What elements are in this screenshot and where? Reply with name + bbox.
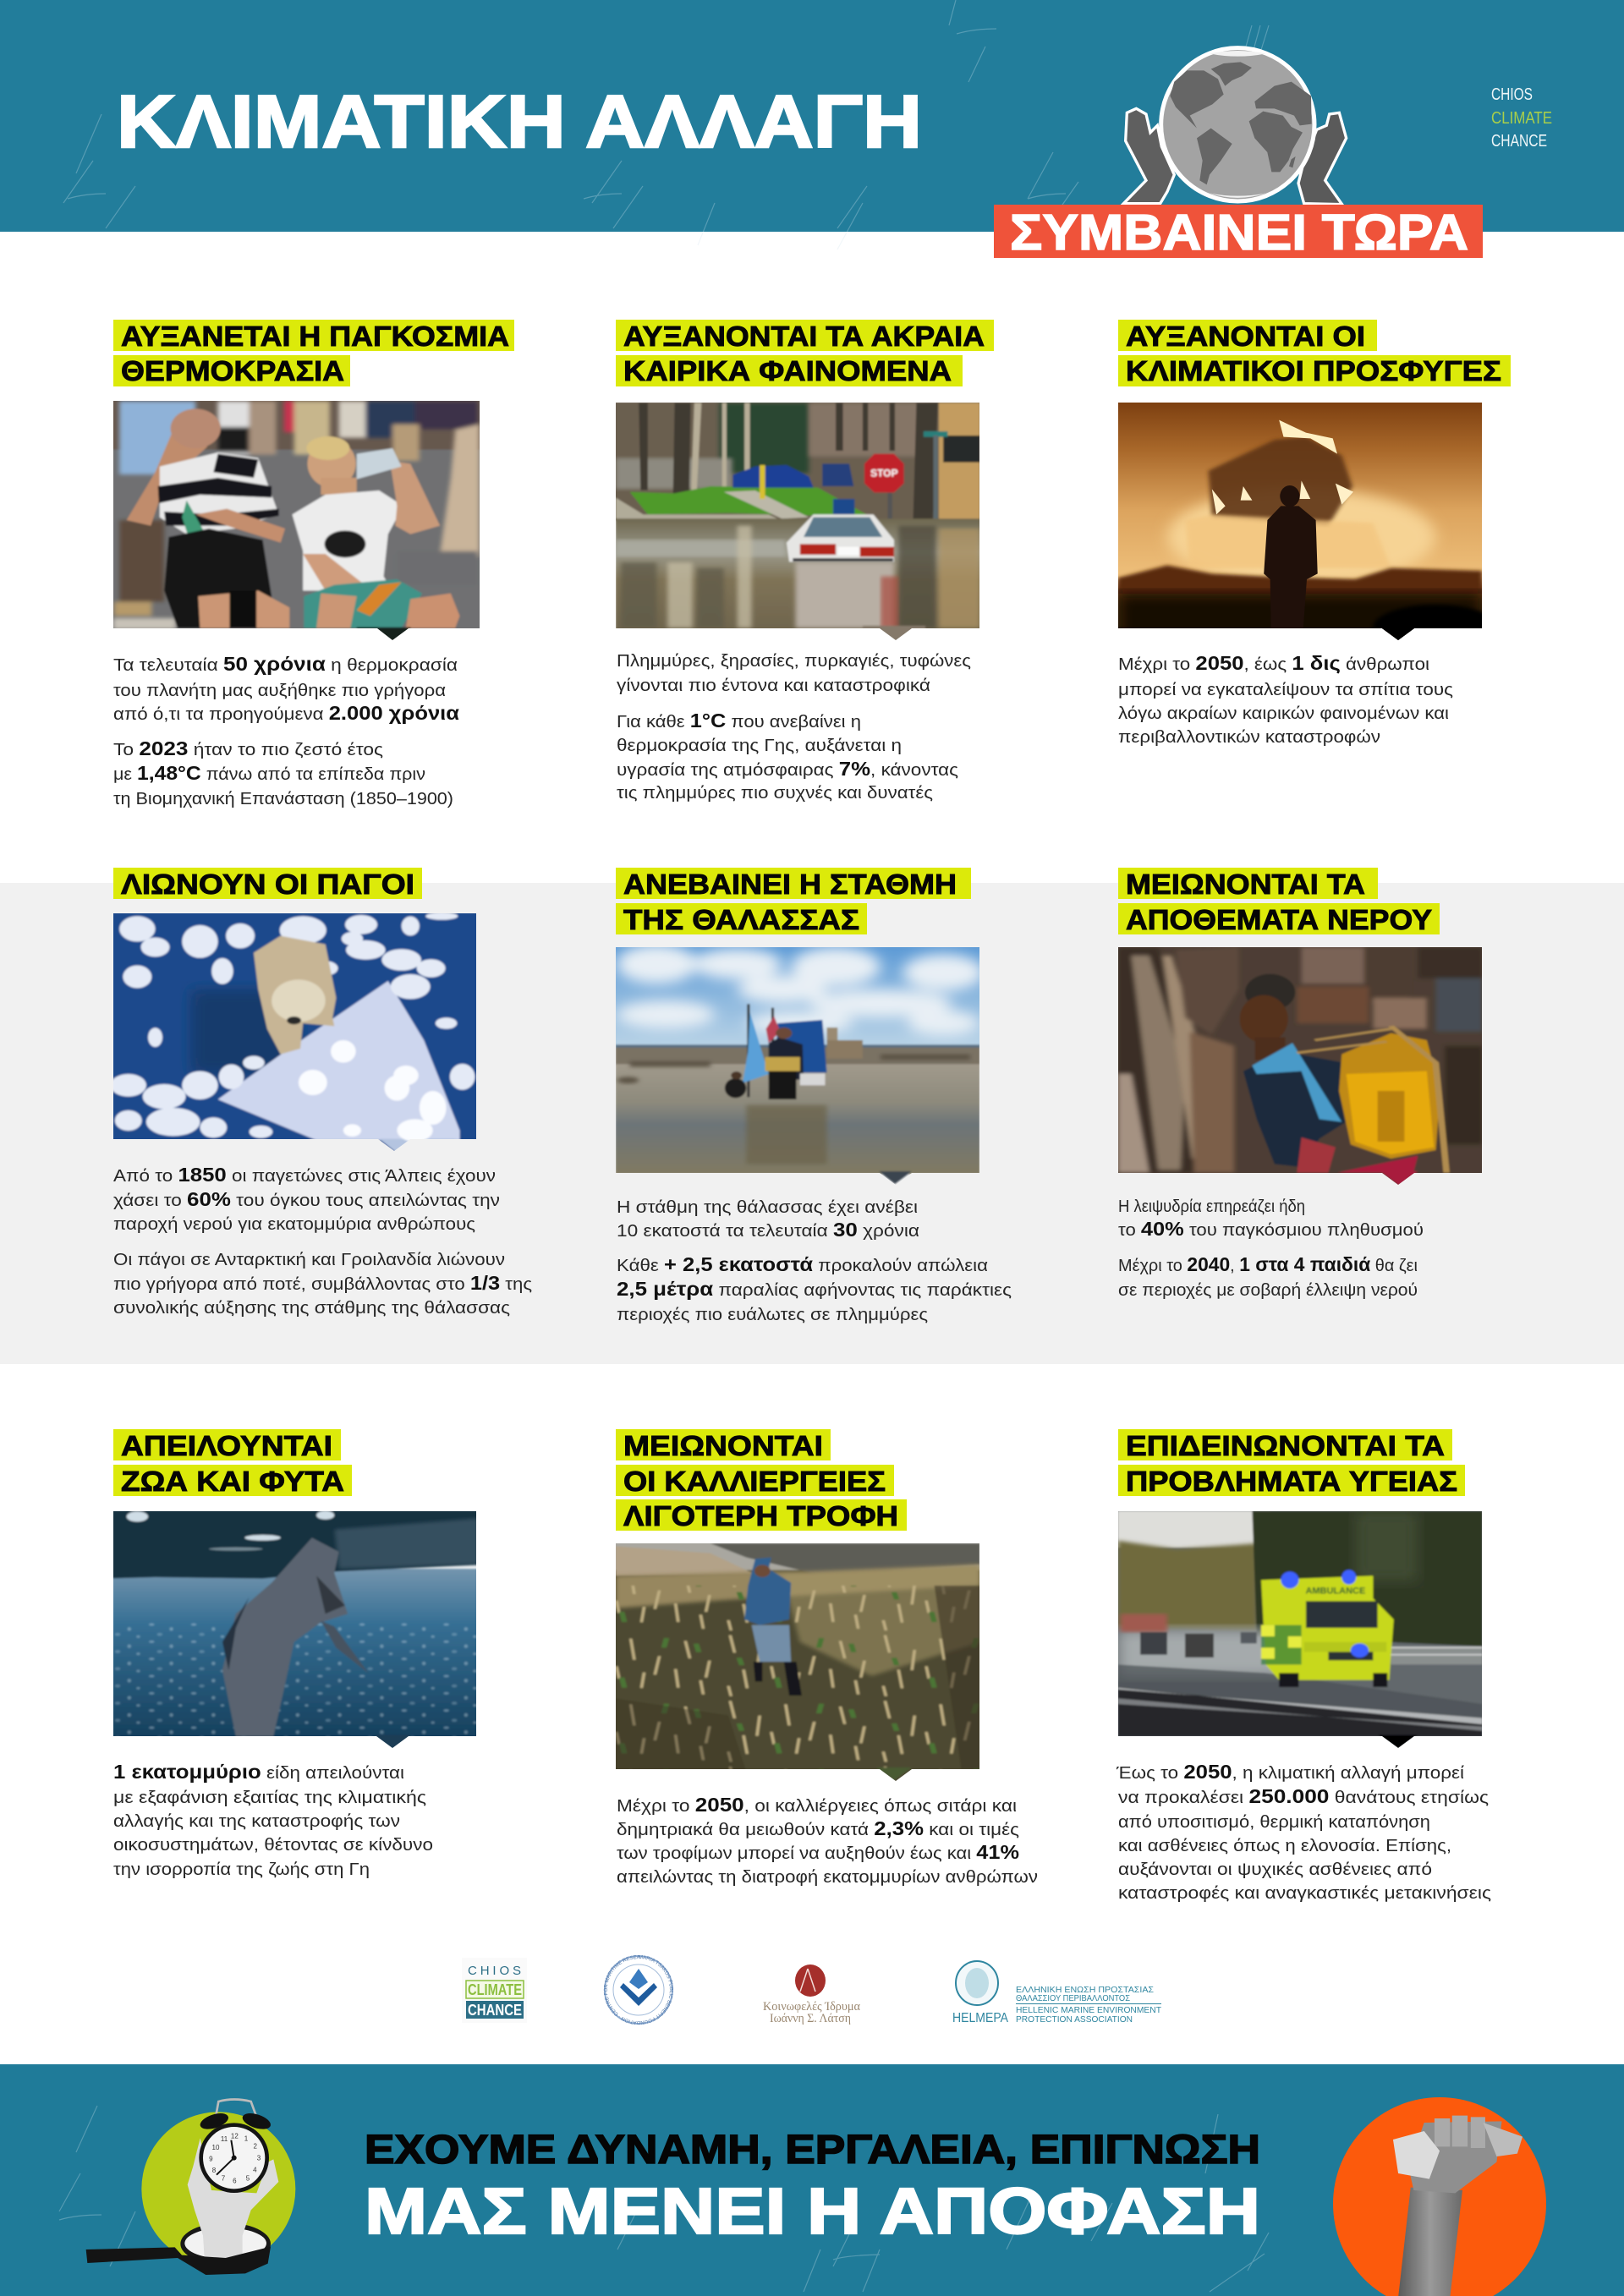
icon: clock in hand through magnifier: 10 <box>212 2144 220 2151</box>
heading <box>1118 320 1511 386</box>
panel: melting ice <box>106 868 532 1318</box>
panel: global temperature <box>102 320 514 808</box>
heading: ΜΕΙΩΝΟΝΤΑΙ <box>623 1430 823 1461</box>
photo: flooded street and car: STOP <box>870 467 898 479</box>
heading: ΖΩΑ ΚΑΙ ΦΥΤΑ <box>121 1466 344 1497</box>
footer banner <box>0 2064 1624 2296</box>
text block: Τα τελευταία 50 χρόνια η θερμοκρασία <box>113 653 458 675</box>
panel: animals and plants <box>106 1429 482 1879</box>
text block: 10 εκατοστά τα τελευταία 30 χρόνια <box>617 1219 919 1241</box>
heading: we have power, tools, awareness: ΕΧΟΥΜΕ ΔΥΝΑΜΗ, ΕΡΓΑΛΕΙΑ, ΕΠΙΓΝΩΣΗ <box>365 2128 1260 2173</box>
text block <box>617 1197 1012 1324</box>
text block: λόγω ακραίων καιρικών φαινομένων και <box>1118 704 1449 723</box>
icon: clock in hand through magnifier: 11 <box>221 2135 228 2143</box>
logo text: chios climate chance: CLIMATE <box>1491 109 1552 128</box>
text block: συνολικής αύξησης της στάθμης της θάλασσας <box>113 1298 510 1318</box>
icon: clock in hand through magnifier: 6 <box>233 2177 237 2184</box>
logo: latsis foundation: Ιωάννη Σ. Λάτση <box>770 2012 851 2025</box>
header banner <box>0 0 1624 260</box>
logo: helmepa: HELMEPA <box>952 2011 1008 2025</box>
heading <box>113 320 514 386</box>
icon: clock in hand through magnifier: 2 <box>253 2143 257 2151</box>
icon: clock in hand through magnifier: 9 <box>209 2155 213 2162</box>
text block: σε περιοχές με σοβαρή έλλειψη νερού <box>1118 1280 1418 1300</box>
panel: health <box>1113 1429 1491 1903</box>
text block: Κάθε + 2,5 εκατοστά προκαλούν απώλεια <box>617 1253 988 1275</box>
logo: latsis foundation: Κοινωφελές Ίδρυμα <box>763 2000 860 2014</box>
text block: των τροφίμων μπορεί να αυξηθούν έως και 41% <box>617 1841 1019 1863</box>
badge: happening now: ΣΥΜΒΑΙΝΕΙ ΤΩΡΑ <box>1010 205 1468 260</box>
text block <box>113 1164 532 1318</box>
text block: μπορεί να εγκαταλείψουν τα σπίτια τους <box>1118 680 1453 699</box>
logo: latsis foundation <box>763 1964 860 2025</box>
logo: chios climate chance: CHANCE <box>468 2002 522 2019</box>
text block: Μέχρι το 2040, 1 στα 4 παιδιά θα ζει <box>1118 1253 1418 1275</box>
logos row <box>465 1955 1162 2025</box>
heading <box>113 1429 352 1497</box>
icon: clock in hand through magnifier: 4 <box>253 2167 257 2174</box>
text block: παροχή νερού για εκατομμύρια ανθρώπους <box>113 1214 475 1234</box>
text block: Μέχρι το 2050 , οι καλλιέργειες όπως σιτάρι και <box>617 1794 1017 1816</box>
heading: ΑΠΟΘΕΜΑΤΑ ΝΕΡΟΥ <box>1126 904 1432 935</box>
photo: ambulance on wet road <box>1113 1510 1490 1752</box>
heading <box>616 1429 907 1532</box>
text block: του πλανήτη μας αυξήθηκε πιο γρήγορα <box>113 681 446 700</box>
photo: people in heat <box>102 399 496 641</box>
text block: περιβαλλοντικών καταστροφών <box>1118 727 1380 747</box>
text block: Η λειψυδρία επηρεάζει ήδη <box>1118 1197 1305 1216</box>
heading: ΑΥΞΑΝΟΝΤΑΙ ΟΙ <box>1126 321 1365 352</box>
text block: αλλαγής και της καταστροφής των <box>113 1811 400 1831</box>
text block: γίνονται πιο έντονα και καταστροφικά <box>617 676 930 695</box>
text block: από υποσιτισμό, θερμική καταπόνηση <box>1118 1812 1430 1832</box>
heading: ΑΥΞΑΝΕΤΑΙ Η ΠΑΓΚΟΣΜΙΑ <box>121 321 509 352</box>
text block: Από το 1850 οι παγετώνες στις Άλπεις έχουν <box>113 1164 496 1186</box>
photo: ambulance on wet road: AMBULANCE <box>1305 1586 1365 1596</box>
text block: να προκαλέσει 250.000 θανάτους ετησίως <box>1118 1785 1489 1807</box>
logo text: chios climate chance <box>1491 85 1552 151</box>
text block: οικοσυστημάτων, θέτοντας σε κίνδυνο <box>113 1835 433 1855</box>
panel: extreme weather <box>612 320 994 803</box>
logo: chios climate chance: CHIOS <box>468 1964 521 1978</box>
heading: ΛΙΩΝΟΥΝ ΟΙ ΠΑΓΟΙ <box>121 869 414 900</box>
text block: και ασθένειες όπως η ελονοσία. Επίσης, <box>1118 1836 1451 1855</box>
heading <box>616 320 994 386</box>
text block: Μέχρι το 2050, έως 1 δις άνθρωποι <box>1118 652 1429 674</box>
text block <box>113 653 460 808</box>
text block: Οι πάγοι σε Ανταρκτική και Γροιλανδία λιώνουν <box>113 1250 505 1269</box>
title: ΚΛΙΜΑΤΙΚΗ ΑΛΛΑΓΗ <box>117 79 922 163</box>
icon: clock in hand through magnifier: 7 <box>222 2174 226 2182</box>
text block: με εξαφάνιση εξαιτίας της κλιματικής <box>113 1788 426 1807</box>
text block: την ισορροπία της ζωής στη Γη <box>113 1860 370 1879</box>
icon: clock in hand through magnifier: 5 <box>246 2175 250 2183</box>
photo: polar bear on ice <box>106 912 482 1154</box>
text block <box>1118 652 1453 747</box>
text block: τις πλημμύρες πιο συχνές και δυνατές <box>617 783 933 803</box>
text block: χάσει το 60% του όγκου τους απειλώντας την <box>113 1188 500 1210</box>
heading: ΛΙΓΟΤΕΡΗ ΤΡΟΦΗ <box>623 1500 898 1532</box>
text block: υγρασία της ατμόσφαιρας 7%, κάνοντας <box>617 758 958 780</box>
logo text: chios climate chance: CHIOS <box>1491 85 1533 104</box>
text block: το 40% του παγκόσμιου πληθυσμού <box>1118 1218 1424 1240</box>
icon: globe held by two hands <box>1123 48 1347 205</box>
photo: seal under water <box>106 1510 482 1752</box>
text block: με 1,48°C πάνω από τα επίπεδα πριν <box>113 762 425 784</box>
panel: climate refugees <box>1113 320 1511 747</box>
text block: τη Βιομηχανική Επανάσταση (1850–1900) <box>113 789 453 808</box>
heading: ΘΕΡΜΟΚΡΑΣΙΑ <box>121 355 344 386</box>
text block <box>113 1761 433 1879</box>
logo: helmepa: HELLENIC MARINE ENVIRONMENT <box>1016 2005 1162 2015</box>
icon: clock in hand through magnifier <box>86 2099 295 2275</box>
text block: Πλημμύρες, ξηρασίες, πυρκαγιές, τυφώνες <box>617 651 971 671</box>
logo: helmepa: ΘΑΛΑΣΣΙΟΥ ΠΕΡΙΒΑΛΛΟΝΤΟΣ <box>1016 1993 1130 2003</box>
band: grey middle row background <box>0 883 1624 1364</box>
heading: ΕΠΙΔΕΙΝΩΝΟΝΤΑΙ ΤΑ <box>1126 1430 1445 1461</box>
heading: ΜΕΙΩΝΟΝΤΑΙ ΤΑ <box>1126 869 1365 900</box>
text block: καταστροφές και αναγκαστικές μετακινήσεις <box>1118 1883 1491 1903</box>
text block: θερμοκρασία της Γης, αυξάνεται η <box>617 736 902 755</box>
heading: ΑΝΕΒΑΙΝΕΙ Η ΣΤΑΘΜΗ <box>623 869 957 900</box>
logo: helmepa: ΕΛΛΗΝΙΚΗ ΕΝΩΣΗ ΠΡΟΣΤΑΣΙΑΣ <box>1016 1985 1155 1995</box>
text block <box>1116 1761 1491 1903</box>
panel: crops and food <box>612 1429 1038 1887</box>
heading: ΑΥΞΑΝΟΝΤΑΙ ΤΑ ΑΚΡΑΙΑ <box>623 321 985 352</box>
heading: ΟΙ ΚΑΛΛΙΕΡΓΕΙΕΣ <box>623 1466 886 1497</box>
photo: farmer in ruined field <box>612 1542 988 1784</box>
text block: πιο γρήγορα από ποτέ, συμβάλλοντας στο 1/3 της <box>113 1272 532 1294</box>
heading: ΚΛΙΜΑΤΙΚΟΙ ΠΡΟΣΦΥΓΕΣ <box>1126 355 1501 386</box>
logo text: chios climate chance: CHANCE <box>1491 132 1547 151</box>
heading <box>1118 868 1440 935</box>
photo: speaker standing in the sea <box>612 945 988 1184</box>
text block <box>617 651 971 803</box>
text block: αυξάνονται οι ψυχικές ασθένειες από <box>1118 1860 1432 1879</box>
text block: απειλώντας τη διατροφή εκατομμυρίων ανθρώπων <box>617 1867 1038 1887</box>
text block: από ό,τι τα προηγούμενα 2.000 χρόνια <box>113 702 460 724</box>
text block: Το 2023 ήταν το πιο ζεστό έτος <box>113 737 383 759</box>
text block: Η στάθμη της θάλασσας έχει ανέβει <box>617 1197 918 1217</box>
icon: raised fist with crumpled bottle <box>1333 2097 1546 2296</box>
logo: chios climate chance <box>462 1958 527 2023</box>
text block: 2,5 μέτρα παραλίας αφήνοντας τις παράκτιες <box>617 1278 1012 1300</box>
heading: ΠΡΟΒΛΗΜΑΤΑ ΥΓΕΙΑΣ <box>1126 1466 1457 1497</box>
panel: sea level <box>612 868 1012 1324</box>
photo: flooded street and car <box>612 402 988 643</box>
logo: chios climate chance: CLIMATE <box>468 1981 522 1998</box>
icon: clock in hand through magnifier: 8 <box>212 2167 217 2174</box>
text block: 1 εκατομμύριο είδη απειλούνται <box>113 1761 404 1783</box>
logo: maritime research foundation <box>604 1955 673 2025</box>
text block: περιοχές πιο ευάλωτες σε πλημμύρες <box>617 1305 928 1324</box>
text block <box>617 1794 1038 1887</box>
heading <box>1118 1429 1465 1497</box>
heading: ΑΠΕΙΛΟΥΝΤΑΙ <box>121 1430 332 1461</box>
logo: helmepa: PROTECTION ASSOCIATION <box>1016 2014 1133 2025</box>
text block: δημητριακά θα μειωθούν κατά 2,3% και οι τιμές <box>617 1817 1019 1839</box>
text block: Για κάθε 1°C που ανεβαίνει η <box>617 710 861 732</box>
panel: water supply <box>1113 868 1490 1300</box>
text block <box>1118 1197 1424 1300</box>
heading: ΤΗΣ ΘΑΛΑΣΣΑΣ <box>623 904 859 935</box>
photo: man before burning house <box>1113 402 1499 649</box>
photo: girl carrying water container <box>1113 945 1490 1188</box>
heading: ΚΑΙΡΙΚΑ ΦΑΙΝΟΜΕΝΑ <box>623 355 952 386</box>
text block: Έως το 2050, η κλιματική αλλαγή μπορεί <box>1116 1761 1464 1783</box>
icon: clock in hand through magnifier: 1 <box>244 2135 249 2143</box>
heading: the decision is ours: ΜΑΣ ΜΕΝΕΙ Η ΑΠΟΦΑΣΗ <box>365 2175 1260 2248</box>
logo: maritime research foundation: MARIA TSAKOS PUBLIC BENEFIT FOUNDATION · CENTRE FOR MARITIME RESEARCH <box>604 1955 673 2025</box>
icon: clock in hand through magnifier: 3 <box>257 2155 261 2162</box>
icon: clock in hand through magnifier: 12 <box>231 2132 239 2140</box>
heading <box>616 868 971 935</box>
logo: helmepa <box>952 1961 1162 2025</box>
